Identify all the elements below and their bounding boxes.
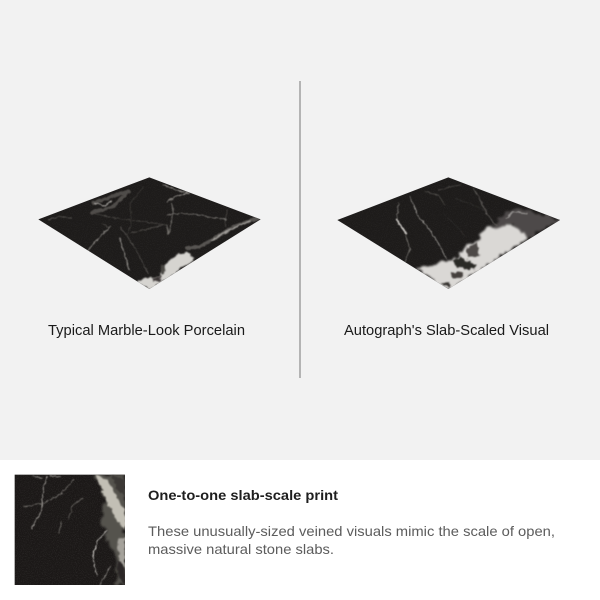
right slab: Autograph's slab-scaled visual — [337, 177, 563, 291]
thumbnail: marble swatch — [15, 475, 125, 585]
top comparison background — [0, 0, 600, 460]
label: typical marble-look porcelain: Typical Marble-Look Porcelain — [48, 323, 245, 339]
caption body text: massive natural stone slabs. — [148, 541, 334, 557]
caption body text — [148, 523, 555, 557]
right slab white cloud patch — [417, 210, 562, 291]
divider between slabs — [300, 81, 301, 378]
left slab white corner patch — [136, 252, 195, 290]
caption body text: These unusually-sized veined visuals mimic the scale of open, — [148, 523, 555, 539]
label: Autograph's slab-scaled visual: Autograph's Slab-Scaled Visual — [344, 323, 549, 339]
right slab veins — [397, 184, 527, 262]
swatch pale vein band — [95, 475, 125, 585]
caption heading: One-to-one slab-scale print — [148, 487, 338, 503]
swatch grain — [15, 475, 125, 585]
swatch veins — [23, 476, 110, 585]
left slab veins — [48, 185, 258, 273]
left slab: typical marble-look porcelain — [37, 177, 263, 290]
bottom caption background — [0, 460, 600, 600]
right slab grain — [345, 180, 510, 265]
left slab grain — [45, 180, 250, 278]
